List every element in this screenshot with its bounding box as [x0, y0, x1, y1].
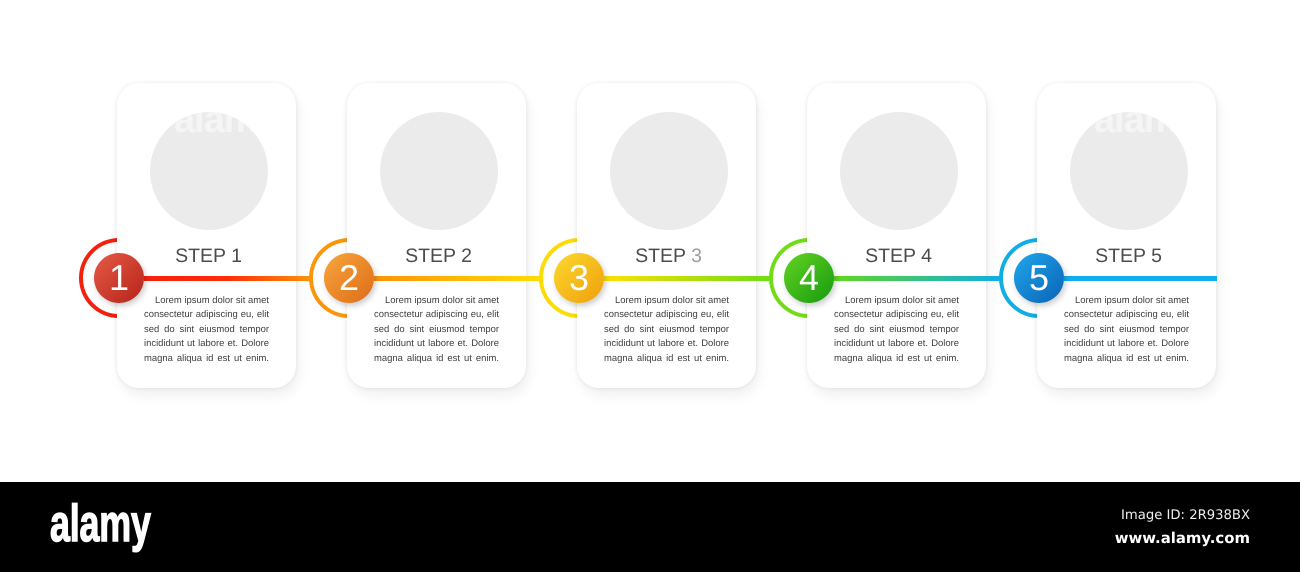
text block: step 5: sed do sint eiusmod tempor: [1064, 324, 1189, 335]
text block: step 1: incididunt ut labore et. Dolore: [144, 338, 269, 349]
image placeholder: step 1: [150, 112, 268, 230]
text block: step 4: incididunt ut labore et. Dolore: [834, 338, 959, 349]
text block: step 2: consectetur adipiscing eu, elit: [374, 309, 499, 320]
number badge: step 2: 2: [339, 257, 359, 298]
heading: step 5: STEP 5: [1095, 245, 1162, 267]
image placeholder: step 5: [1070, 112, 1188, 230]
text block: step 1: consectetur adipiscing eu, elit: [144, 309, 269, 320]
text block: step 3: Lorem ipsum dolor sit amet: [615, 295, 729, 306]
text block: step 2: Lorem ipsum dolor sit amet: [385, 295, 499, 306]
text block: step 3: sed do sint eiusmod tempor: [604, 324, 729, 335]
text block: step 1: [144, 295, 269, 364]
card: step 5: [1037, 83, 1216, 388]
arc: step 5: [999, 238, 1037, 318]
text block: step 4: magna aliqua id est ut enim.: [834, 353, 959, 364]
text block: step 5: Lorem ipsum dolor sit amet: [1075, 295, 1189, 306]
text block: step 3: [604, 295, 729, 364]
number badge: step 5: 5: [1029, 257, 1049, 298]
connector line: step 4: [834, 276, 1000, 280]
heading: step 4: STEP 4: [865, 245, 932, 267]
step 5: [999, 82, 1219, 394]
image placeholder: step 4: [840, 112, 958, 230]
number badge: step 5: [1014, 253, 1064, 303]
image placeholder: step 2: [380, 112, 498, 230]
step 1: [79, 82, 310, 394]
number badge: step 1: 1: [109, 257, 129, 298]
step 4: [769, 82, 1000, 394]
footer bar: [0, 482, 1300, 572]
arc: step 1: [79, 238, 117, 318]
text block: step 4: Lorem ipsum dolor sit amet: [845, 295, 959, 306]
image placeholder: step 3: [610, 112, 728, 230]
logo: alamy: alamy: [50, 495, 151, 553]
text block: step 5: incididunt ut labore et. Dolore: [1064, 338, 1189, 349]
heading: step 1: STEP 1: [175, 245, 242, 267]
text block: step 1: sed do sint eiusmod tempor: [144, 324, 269, 335]
text block: step 3: incididunt ut labore et. Dolore: [604, 338, 729, 349]
text block: step 5: magna aliqua id est ut enim.: [1064, 353, 1189, 364]
number badge: step 1: [94, 253, 144, 303]
text block: step 4: sed do sint eiusmod tempor: [834, 324, 959, 335]
text block: step 3: consectetur adipiscing eu, elit: [604, 309, 729, 320]
step 2: [309, 82, 540, 394]
text block: step 2: [374, 295, 499, 364]
arc: step 3: [539, 238, 577, 318]
text block: step 5: consectetur adipiscing eu, elit: [1064, 309, 1189, 320]
step 3: [539, 82, 770, 394]
number badge: step 3: 3: [569, 257, 589, 298]
text block: step 3: magna aliqua id est ut enim.: [604, 353, 729, 364]
card: step 3: [577, 83, 756, 388]
text block: step 2: magna aliqua id est ut enim.: [374, 353, 499, 364]
connector line: step 3: [604, 276, 770, 280]
text block: step 1: Lorem ipsum dolor sit amet: [155, 295, 269, 306]
website: www.alamy.com: [1115, 529, 1250, 547]
number badge: step 4: [784, 253, 834, 303]
number badge: step 4: 4: [799, 257, 819, 298]
connector line: step 5: [1064, 276, 1217, 280]
text block: step 2: sed do sint eiusmod tempor: [374, 324, 499, 335]
heading: step 3: STEP 3: [635, 245, 702, 267]
connector line: step 1: [144, 276, 310, 280]
number badge: step 2: [324, 253, 374, 303]
connector line: step 2: [374, 276, 540, 280]
number badge: step 3: [554, 253, 604, 303]
card: step 1: [117, 83, 296, 388]
text block: step 5: [1064, 295, 1189, 364]
text block: step 1: magna aliqua id est ut enim.: [144, 353, 269, 364]
image id: Image ID: 2R938BX: [1121, 508, 1250, 523]
card: step 2: [347, 83, 526, 388]
text block: step 2: incididunt ut labore et. Dolore: [374, 338, 499, 349]
card: step 4: [807, 83, 986, 388]
text block: step 4: consectetur adipiscing eu, elit: [834, 309, 959, 320]
arc: step 4: [769, 238, 807, 318]
text block: step 4: [834, 295, 959, 364]
arc: step 2: [309, 238, 347, 318]
heading: step 2: STEP 2: [405, 245, 472, 267]
